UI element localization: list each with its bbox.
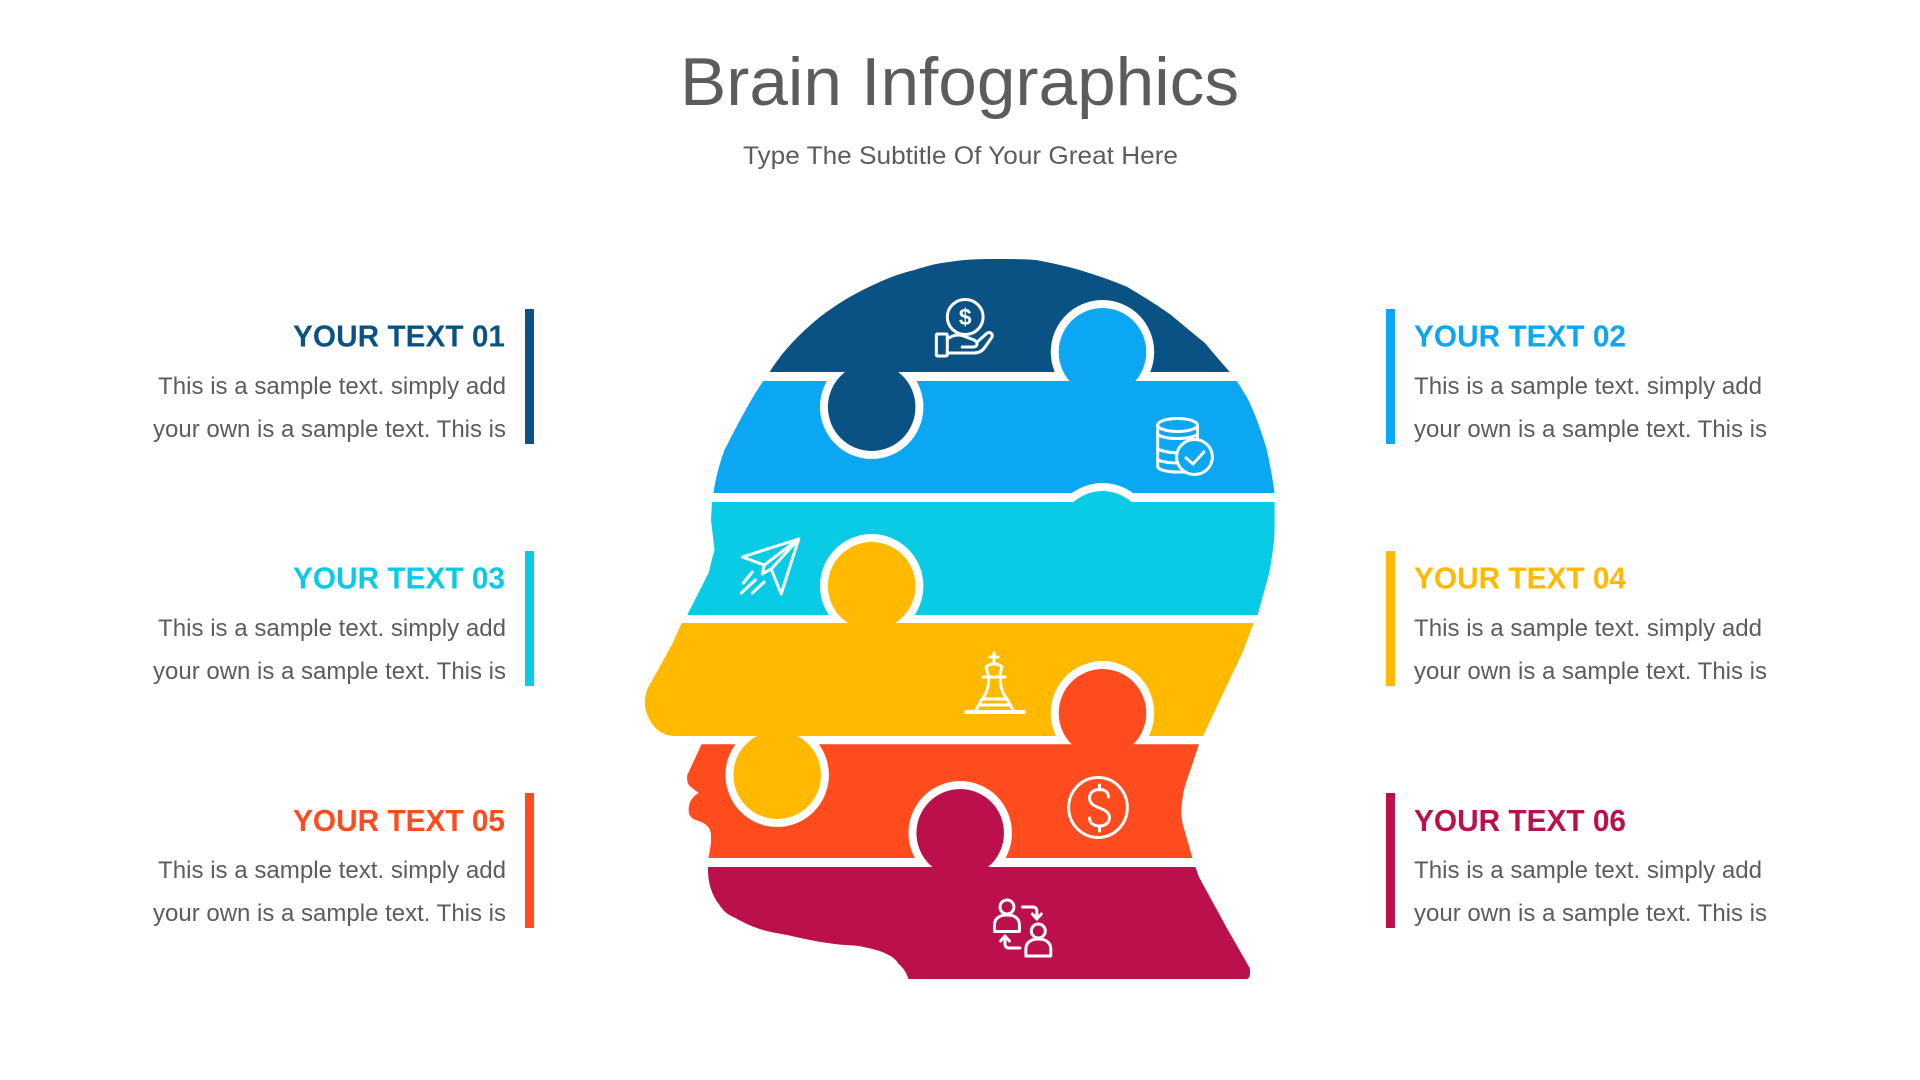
heading 06: YOUR TEXT 06 (1414, 803, 1626, 838)
subtitle: Type The Subtitle Of Your Great Here (743, 142, 1178, 170)
icon: chess king (966, 653, 1024, 712)
icon: people exchange (995, 900, 1051, 956)
body 05: This is a sample text. simply add (158, 857, 506, 884)
body 06: your own is a sample text. This is (1414, 900, 1767, 927)
puzzle piece 6: maroon jaw (708, 781, 1250, 979)
body 01 (153, 373, 506, 443)
title: Brain Infographics (680, 44, 1239, 120)
accent bar 02 (1386, 309, 1395, 444)
panel: text 03 (153, 551, 534, 686)
icon: hand with coin: $ (959, 304, 972, 330)
accent bar 04 (1386, 551, 1395, 686)
icon: hand with coin (936, 300, 992, 356)
puzzle piece 5: orange band (687, 661, 1199, 858)
heading 02: YOUR TEXT 02 (1414, 319, 1626, 354)
heading 03: YOUR TEXT 03 (293, 561, 505, 596)
body 02: This is a sample text. simply add (1414, 373, 1762, 400)
body 03: your own is a sample text. This is (153, 658, 506, 685)
heading 01: YOUR TEXT 01 (293, 319, 505, 354)
body 05 (153, 857, 506, 927)
body 04: your own is a sample text. This is (1414, 658, 1767, 685)
puzzle piece 3: cyan band (687, 483, 1275, 615)
icon: dollar circle (1069, 778, 1127, 838)
body 06: This is a sample text. simply add (1414, 857, 1762, 884)
knob: gold into orange band (725, 736, 829, 827)
accent bar 01 (525, 309, 534, 444)
panel: text 02 (1386, 309, 1767, 444)
body 05: your own is a sample text. This is (153, 900, 506, 927)
accent bar 06 (1386, 793, 1395, 928)
body 04: This is a sample text. simply add (1414, 615, 1762, 642)
body 02 (1414, 373, 1767, 443)
panel: text 01 (153, 309, 534, 444)
panel: text 06 (1386, 793, 1767, 928)
heading 05: YOUR TEXT 05 (293, 803, 505, 838)
body 06 (1414, 857, 1767, 927)
accent bar 03 (525, 551, 534, 686)
body 02: your own is a sample text. This is (1414, 416, 1767, 443)
knob: dark blue into blue band (820, 372, 924, 459)
body 01: This is a sample text. simply add (158, 373, 506, 400)
puzzle piece 1: dark blue crown (770, 259, 1230, 372)
puzzle piece 4: gold band (645, 534, 1254, 736)
panel: text 05 (153, 793, 534, 928)
puzzle piece 2: blue band (714, 300, 1275, 493)
accent bar 05 (525, 793, 534, 928)
body 01: your own is a sample text. This is (153, 416, 506, 443)
head puzzle chart (645, 259, 1275, 979)
icon: paper plane (741, 539, 799, 594)
icon: database with check (1158, 418, 1212, 474)
body 03: This is a sample text. simply add (158, 615, 506, 642)
body 04 (1414, 615, 1767, 685)
body 03 (153, 615, 506, 685)
heading 04: YOUR TEXT 04 (1414, 561, 1627, 596)
panel: text 04 (1386, 551, 1767, 686)
